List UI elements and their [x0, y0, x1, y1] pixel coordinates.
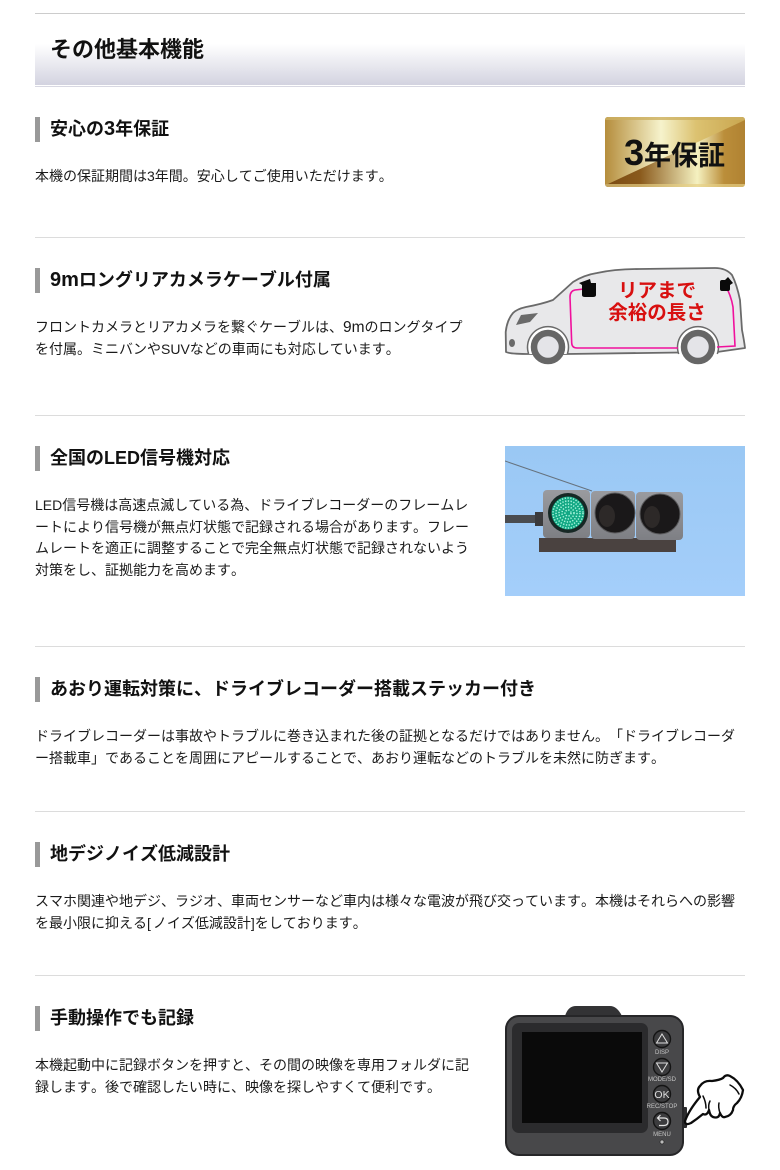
- front camera: [579, 279, 596, 297]
- illustration: dash cam with pointing hand: [505, 1006, 744, 1156]
- illustration: dash cam with pointing hand: DISP: [655, 1050, 669, 1056]
- title banner: [35, 13, 745, 85]
- heading: LED signal: 全国のLED信号機対応: [50, 448, 230, 468]
- headlight: [516, 313, 538, 325]
- van label: 余裕の長さ: [608, 302, 706, 324]
- camera buttons: [654, 1030, 670, 1130]
- green lamp: [548, 493, 588, 533]
- illustration: van with rear cable: [504, 267, 746, 364]
- illustration: dash cam with pointing hand: OK: [654, 1089, 670, 1101]
- text: noise reduction: を最小限に抑える[ノイズ低減設計]をしております。: [35, 915, 367, 931]
- heading: 3-year warranty: 安心の3年保証: [50, 118, 169, 140]
- rear camera: [720, 277, 733, 291]
- text: LED signal: 対策をし、証拠能力を高めます。: [35, 562, 245, 578]
- dark lamps: [595, 493, 635, 533]
- van body: [506, 268, 745, 354]
- illustration: dash cam with pointing hand: REC/STOP: [647, 1104, 677, 1110]
- badge: 3-year warranty: 3年保証: [624, 132, 725, 173]
- text: manual recording: 本機起動中に記録ボタンを押すと、その間の映像を専用フォルダに記: [35, 1057, 469, 1073]
- heading: noise reduction: 地デジノイズ低減設計: [50, 844, 230, 864]
- text: LED signal: [35, 497, 469, 578]
- pointing hand: [685, 1075, 743, 1124]
- text: road rage sticker: ー搭載車」であることを周囲にアピールすることで、あおり運転などのトラブルを未然に防ぎます。: [35, 750, 665, 766]
- text: noise reduction: スマホ関連や地デジ、ラジオ、車両センサーなど車内は様々な電波が飛び交っています。本機はそれらへの影響: [35, 893, 735, 909]
- text: 9m cable: フロントカメラとリアカメラを繋ぐケーブルは、9mのロングタイプ: [35, 319, 463, 336]
- text: road rage sticker: [35, 728, 735, 766]
- illustration: dash cam with pointing hand: MENU: [653, 1132, 671, 1138]
- photo: traffic light: [505, 446, 745, 596]
- text: manual recording: [35, 1057, 469, 1095]
- text: LED signal: LED信号機は高速点滅している為、ドライブレコーダーのフレームレ: [35, 497, 468, 513]
- text: 9m cable: [35, 319, 463, 357]
- wheel arches: [528, 327, 718, 354]
- illustration: dash cam with pointing hand: MODE/SD: [648, 1077, 677, 1083]
- van label: リアまで: [618, 280, 696, 302]
- wheels: [534, 333, 712, 361]
- heading: 9m cable: 9mロングリアカメラケーブル付属: [50, 269, 331, 291]
- text: 9m cable: を付属。ミニバンやSUVなどの車両にも対応しています。: [35, 341, 400, 357]
- badge: 3-year warranty: [605, 117, 745, 187]
- cable: [570, 285, 735, 348]
- heading: manual recording: 手動操作でも記録: [50, 1008, 194, 1028]
- text: manual recording: 録します。後で確認したい時に、映像を探しやすくて便利です。: [35, 1079, 441, 1095]
- van label: [608, 280, 706, 324]
- text: LED signal: ムレートを適正に調整することで完全無点灯状態で記録されないよう: [35, 540, 469, 556]
- text: 3-year warranty: 本機の保証期間は3年間。安心してご使用いただけます。: [35, 168, 393, 184]
- title: その他基本機能: [50, 37, 204, 62]
- text: road rage sticker: ドライブレコーダーは事故やトラブルに巻き込まれた後の証拠となるだけではありません。「ドライブレコーダ: [35, 728, 735, 744]
- signal housing: [539, 490, 683, 552]
- text: noise reduction: [35, 893, 735, 931]
- heading: road rage sticker: あおり運転対策に、ドライブレコーダー搭載ステッカー付き: [50, 679, 536, 699]
- text: LED signal: ートにより信号機が無点灯状態で記録される場合があります。フレー: [35, 519, 469, 535]
